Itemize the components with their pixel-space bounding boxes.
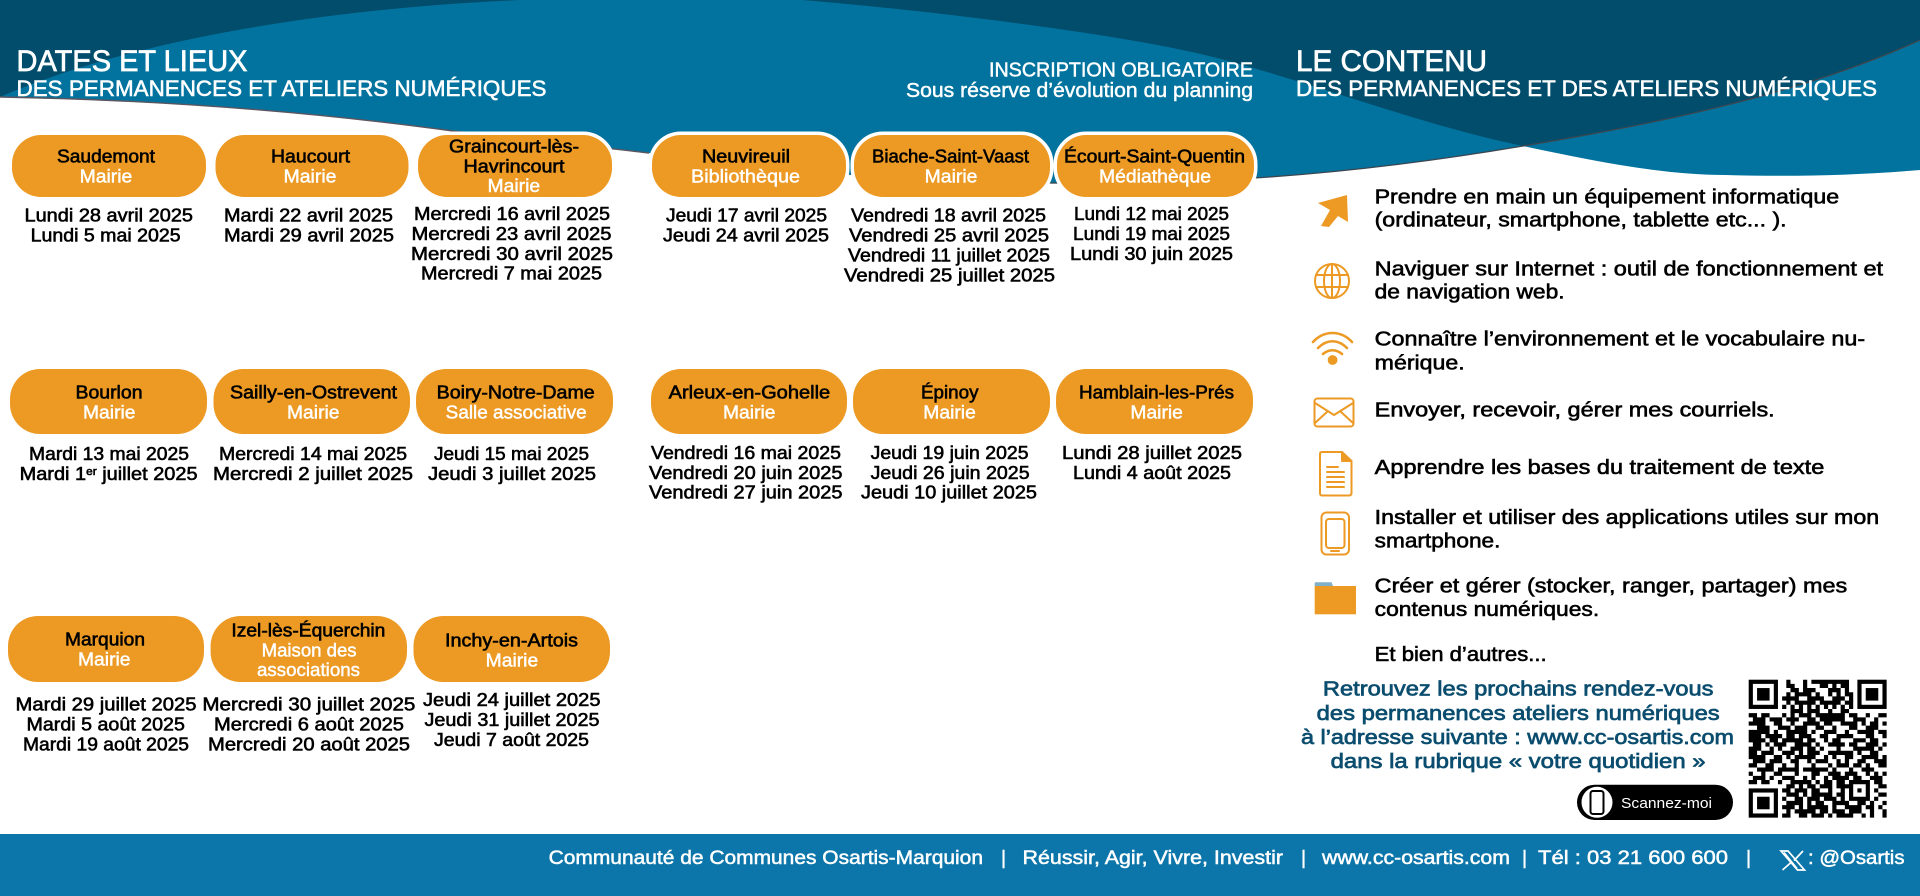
panel: Épinoy [853,369,1050,502]
button: scannez-moi [1577,785,1733,820]
dates: Jeudi 7 août 2025 [434,729,589,750]
dates: Lundi 28 avril 2025 [24,205,193,226]
location pill: Sailly-en-Ostrevent [230,382,397,403]
text: creer et gerer: Créer et gérer (stocker, ranger, partager) mes [1375,575,1847,598]
dates [423,689,600,750]
location pill [651,369,847,434]
text: naviguer: de navigation web. [1375,280,1565,303]
dates: Vendredi 20 juin 2025 [649,462,842,483]
location pill [854,135,1050,197]
location pill: Graincourt-lès- [449,136,579,157]
icon: envelope [1314,398,1354,426]
panel: Neuvireuil [652,135,846,246]
text: prendre en main [1375,185,1839,232]
footer band: Tél : 03 21 600 600 [1538,847,1728,869]
panel: Hamblain-les-Prés [1056,369,1253,483]
dates [428,443,596,484]
dates [649,442,842,502]
title: dates et lieux: DATES ET LIEUX [16,45,248,78]
text: prendre en main: Prendre en main un équipement informatique [1375,185,1839,208]
dates: juillet 2025 [97,463,198,484]
location pill [853,369,1050,434]
text: naviguer: Naviguer sur Internet : outil de fonctionnement et [1375,257,1883,280]
dates [16,694,196,755]
footer band: : @Osartis [1808,847,1905,869]
dates [1062,442,1242,483]
dates: Lundi 30 juin 2025 [1070,243,1233,264]
location pill [1056,369,1253,434]
title: dates et lieux: DES PERMANENCES ET ATELIERS NUMÉRIQUES [16,76,546,101]
notice: inscription obligatoire [906,60,1253,102]
callout: prochains rendez-vous: Retrouvez les prochains rendez-vous [1323,678,1714,701]
footer band: | [1522,847,1527,869]
dates: Vendredi 27 juin 2025 [649,482,842,502]
location pill: Mairie [486,650,538,671]
location pill: Biache-Saint-Vaast [872,145,1029,166]
dates: Mardi 22 avril 2025 [224,205,393,226]
panel: Sailly-en-Ostrevent [213,369,413,484]
location pill [1057,135,1254,197]
location pill [10,369,207,434]
footer band: www.cc-osartis.com [1321,847,1510,869]
dates: Mardi 1 [20,463,81,484]
panel: Izel-lès-Équerchin [202,616,415,755]
text: prendre en main: (ordinateur, smartphone, tablette etc... ). [1375,209,1787,232]
notice: inscription obligatoire: INSCRIPTION OBLIGATOIRE [989,60,1253,82]
dates: Jeudi 15 mai 2025 [434,443,589,464]
dates: Jeudi 17 avril 2025 [666,205,827,226]
dates: Mercredi 23 avril 2025 [412,223,612,244]
dates: Lundi 28 juillet 2025 [1062,442,1242,463]
panel: Saudemont [12,135,206,246]
footer band [0,834,1920,896]
notice: inscription obligatoire: Sous réserve d’évolution du planning [906,80,1253,102]
dates [861,442,1037,502]
dates: Lundi 12 mai 2025 [1074,203,1229,224]
dates: Mardi 19 août 2025 [23,734,189,755]
dates: Mercredi 16 avril 2025 [414,203,610,224]
title: le contenu: LE CONTENU [1296,45,1487,78]
location pill: Médiathèque [1099,165,1211,186]
title: le contenu: DES PERMANENCES ET DES ATELIERS NUMÉRIQUES [1296,76,1877,101]
dates: Jeudi 31 juillet 2025 [424,709,600,730]
location pill [12,135,206,197]
location pill: Mairie [925,165,977,186]
callout: prochains rendez-vous: à l’adresse suivante : www.cc-osartis.com [1301,726,1734,749]
title: dates et lieux [16,45,546,101]
panel: Inchy-en-Artois [414,616,610,750]
text: creer et gerer [1375,575,1847,621]
dates [663,205,829,246]
location pill: Mairie [78,649,130,670]
callout: prochains rendez-vous [1301,678,1734,773]
location pill: Havrincourt [464,156,564,177]
location pill: Mairie [488,175,540,196]
panel: Bourlon [10,369,207,484]
footer band: Réussir, Agir, Vivre, Investir [1022,847,1284,869]
location pill [8,616,204,682]
icon: globe [1315,264,1349,298]
panel: Marquion [8,616,204,755]
location pill: Marquion [65,629,145,650]
callout: prochains rendez-vous: des permanences ateliers numériques [1317,702,1720,725]
location pill: Inchy-en-Artois [445,630,578,651]
footer band: | [1001,847,1006,869]
dates: Mardi 29 juillet 2025 [16,694,196,715]
location pill: Écourt-Saint-Quentin [1064,145,1245,166]
dates: Vendredi 18 avril 2025 [851,205,1046,226]
location pill: Mairie [284,165,336,186]
location pill: Bourlon [76,382,142,403]
dates [20,443,198,484]
panel: Arleux-en-Gohelle [649,369,847,502]
icon: document [1320,452,1352,496]
location pill: Arleux-en-Gohelle [669,382,830,403]
dates: Vendredi 25 juillet 2025 [844,264,1055,286]
dates: Mercredi 2 juillet 2025 [213,463,413,484]
text: connaitre [1375,328,1865,374]
icon: wifi [1313,333,1352,364]
location pill: Maison des [262,640,357,661]
button: scannez-moi: Scannez-moi [1621,796,1712,812]
callout: prochains rendez-vous: dans la rubrique « votre quotidien » [1331,750,1706,773]
dates [24,205,193,246]
dates [224,205,394,246]
dates: Mercredi 20 août 2025 [208,734,410,755]
dates: Mardi 29 avril 2025 [224,225,394,246]
location pill: Mairie [83,402,136,422]
text: applications: smartphone. [1375,530,1500,553]
location pill: Haucourt [271,145,350,166]
location pill: Boiry-Notre-Dame [437,382,595,403]
dates: Jeudi 24 avril 2025 [663,225,829,246]
dates: Mercredi 30 juillet 2025 [202,694,415,715]
location pill [652,135,846,197]
location pill: associations [257,659,360,680]
text: creer et gerer: contenus numériques. [1375,598,1599,621]
location pill [414,616,610,682]
dates: er [86,466,97,478]
dates: Vendredi 25 avril 2025 [849,225,1049,246]
location pill: Mairie [80,165,132,186]
dates [844,205,1055,286]
dates [202,694,415,755]
text: applications: Installer et utiliser des applications utiles sur mon [1375,506,1879,529]
dates: Jeudi 19 juin 2025 [871,442,1029,463]
icon: smartphone [1322,512,1349,554]
dates: Vendredi 11 juillet 2025 [848,245,1050,266]
panel: Écourt-Saint-Quentin [1057,135,1254,264]
location pill [216,135,408,197]
dates: Mercredi 7 mai 2025 [421,262,602,284]
icon: folder [1315,582,1356,614]
footer band: | [1301,847,1306,869]
location pill [418,135,612,197]
panel: Biache-Saint-Vaast [844,135,1055,286]
location pill: Épinoy [921,382,979,403]
dates: Jeudi 26 juin 2025 [871,462,1030,483]
text: applications [1375,506,1879,553]
dates: Mercredi 14 mai 2025 [219,443,407,464]
location pill [211,616,407,682]
panel: Haucourt [216,135,408,246]
text: naviguer [1375,257,1883,303]
text: traitement de texte: Apprendre les bases du traitement de texte [1375,456,1824,479]
location pill: Mairie [723,402,776,422]
location pill: Neuvireuil [702,145,790,166]
panel: Graincourt-lès-Havrincourt [411,135,613,284]
dates: Jeudi 10 juillet 2025 [861,482,1037,502]
location pill: Hamblain-les-Prés [1079,382,1234,403]
dates: Lundi 19 mai 2025 [1073,223,1230,244]
header wave background [0,0,1920,184]
location pill: Saudemont [57,145,155,166]
dates: Mercredi 30 avril 2025 [411,243,613,264]
dates [411,203,613,284]
text: et bien d'autres: Et bien d’autres... [1375,643,1547,666]
icon: cursor arrow [1318,195,1348,227]
location pill: Izel-lès-Équerchin [231,620,385,641]
text: envoyer: Envoyer, recevoir, gérer mes courriels. [1375,399,1775,422]
title: le contenu [1296,45,1877,101]
dates: Jeudi 3 juillet 2025 [428,463,596,484]
location pill: Salle associative [446,402,587,422]
text: connaitre: mérique. [1375,352,1465,374]
dates: Mercredi 6 août 2025 [214,714,404,735]
footer band: | [1746,847,1751,869]
location pill: Bibliothèque [691,165,800,186]
location pill [214,369,410,434]
location pill: Mairie [923,402,976,422]
dates: Jeudi 24 juillet 2025 [423,689,600,710]
panel: contenu list [1313,185,1883,666]
dates: Mardi 5 août 2025 [26,714,185,735]
dates: Vendredi 16 mai 2025 [651,442,841,463]
dates: Mardi 13 mai 2025 [29,443,189,464]
dates [1070,203,1233,264]
dates [213,443,413,484]
icon: X logo [1781,851,1804,870]
footer band: Communauté de Communes Osartis-Marquion [549,847,983,869]
QR code [1749,680,1887,818]
location pill: Mairie [287,402,340,422]
dates: Lundi 4 août 2025 [1073,462,1231,483]
panel: Boiry-Notre-Dame [416,369,613,484]
location pill [416,369,613,434]
text: connaitre: Connaître l’environnement et le vocabulaire nu- [1375,328,1865,351]
location pill: Mairie [1130,402,1183,422]
dates: Lundi 5 mai 2025 [31,225,181,246]
